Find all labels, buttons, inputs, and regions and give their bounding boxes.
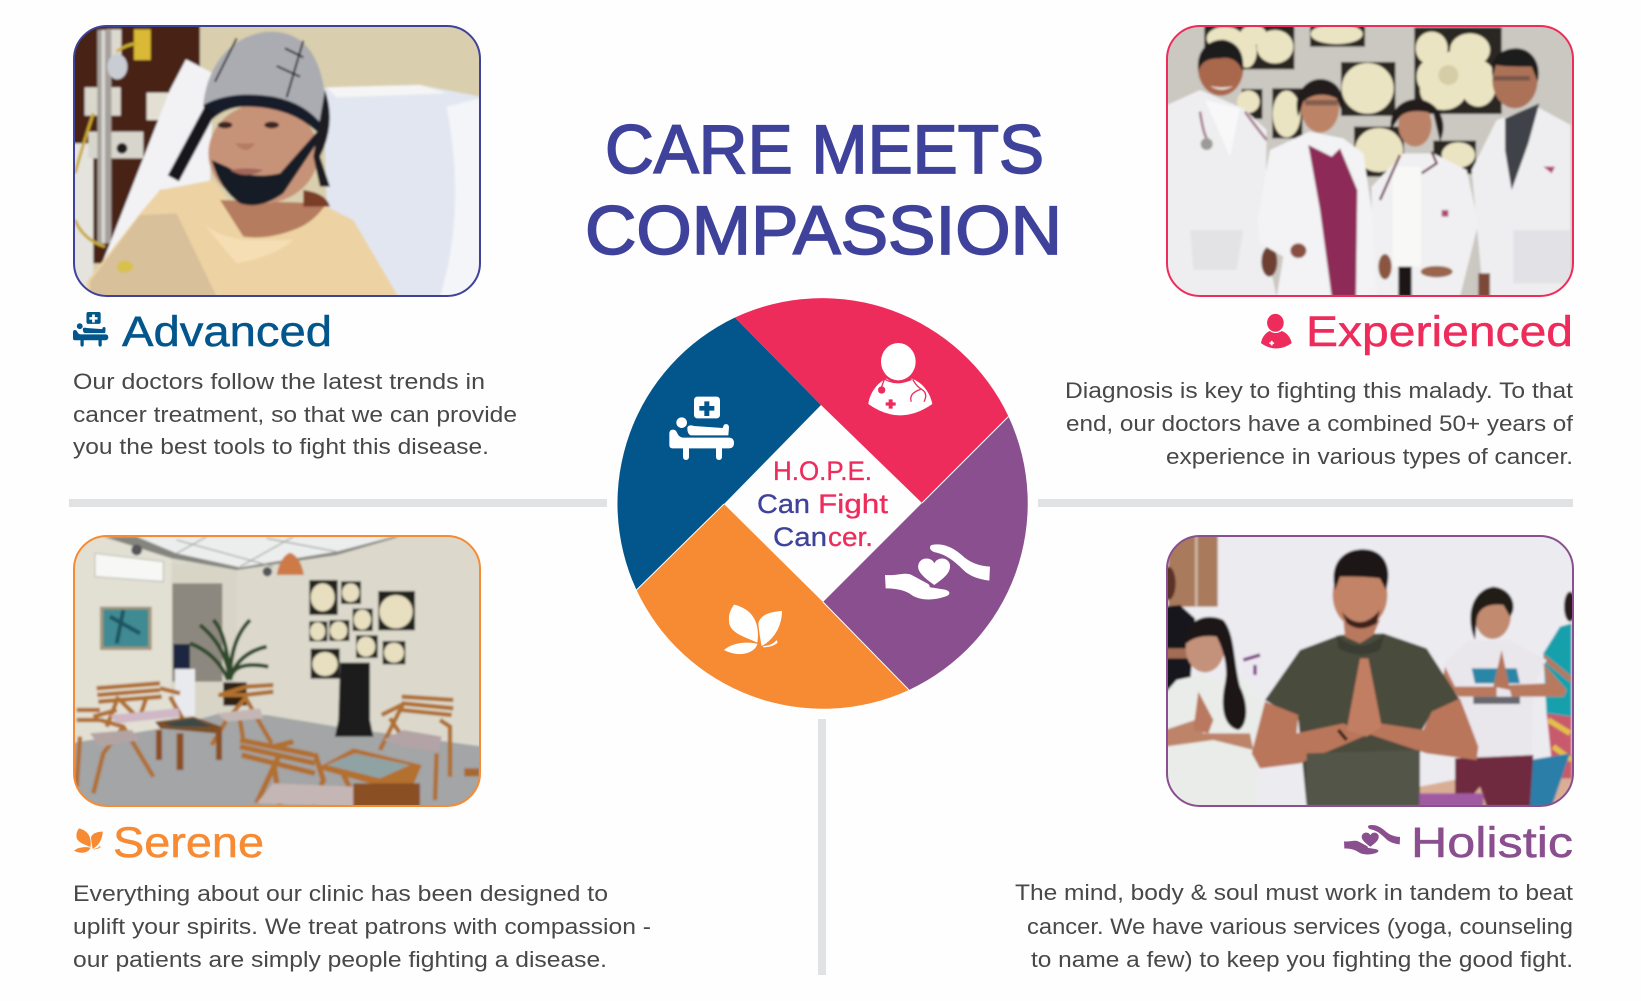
icon: caring hands — [1344, 825, 1400, 854]
icon: patient in bed — [669, 397, 734, 460]
wedge: holistic — [823, 416, 1028, 690]
body text: serene — [73, 881, 651, 972]
body text: experienced: experience in various types of cancer. — [1166, 444, 1573, 469]
photo frame — [1167, 536, 1573, 806]
panel: experienced — [1065, 23, 1577, 469]
photo frame — [74, 536, 480, 806]
photo frame — [1167, 26, 1573, 296]
heading: advanced: Advanced — [122, 308, 332, 356]
body text: experienced: Diagnosis is key to fighting this malady. To that — [1065, 378, 1574, 403]
icon: hospital bed — [73, 312, 108, 347]
centre slogan: cer. — [828, 522, 873, 552]
centre slogan: Can — [773, 522, 827, 552]
divider: bottom vertical — [818, 719, 826, 975]
body text: experienced: end, our doctors have a combined 50+ years of — [1066, 411, 1574, 436]
title — [585, 111, 1062, 269]
photo frame — [74, 26, 480, 296]
body text: advanced: Our doctors follow the latest trends in — [73, 369, 485, 394]
body text: experienced — [1065, 378, 1574, 469]
divider: right horizontal — [1038, 499, 1573, 507]
centre slogan: Can — [757, 489, 810, 519]
panel: advanced — [70, 23, 517, 459]
centre slogan: H.O.P.E. — [773, 456, 872, 486]
body text: serene: uplift your spirits. We treat patrons with compassion - — [73, 914, 651, 939]
icon: doctor with stethoscope — [868, 343, 932, 415]
wedge: advanced — [617, 318, 821, 590]
heading: holistic: Holistic — [1411, 819, 1573, 867]
central wheel — [617, 298, 1028, 709]
photo: patient wearing a cooling cap — [70, 23, 483, 300]
body text: holistic: to name a few) to keep you fighting the good fight. — [1031, 947, 1573, 972]
photo: clinic lounge — [70, 533, 483, 810]
panel: holistic — [1015, 533, 1577, 972]
icon: butterfly — [74, 828, 103, 853]
centre slogan: Fight — [818, 489, 889, 519]
icon: doctor — [1261, 314, 1292, 349]
title: COMPASSION — [585, 192, 1062, 269]
title: CARE MEETS — [605, 111, 1044, 188]
divider: left horizontal — [69, 499, 607, 507]
body text: serene: our patients are simply people fighting a disease. — [73, 947, 607, 972]
heading: experienced: Experienced — [1306, 308, 1573, 356]
body text: advanced — [73, 369, 517, 459]
photo: four doctors in white coats — [1163, 23, 1577, 300]
icon: butterfly — [724, 605, 782, 654]
body text: advanced: cancer treatment, so that we can provide — [73, 402, 517, 427]
body text: holistic: cancer. We have various services (yoga, counseling — [1027, 914, 1573, 939]
icon: hands holding a heart — [885, 544, 990, 599]
heading: serene: Serene — [113, 819, 264, 867]
panel: serene — [70, 533, 651, 972]
centre slogan — [757, 456, 889, 552]
wedge: experienced — [735, 298, 1008, 503]
body text: serene: Everything about our clinic has been designed to — [73, 881, 608, 906]
body text: holistic: The mind, body & soul must work in tandem to beat — [1015, 880, 1574, 905]
wedge: serene — [636, 504, 909, 709]
photo: yoga group with hands together — [1161, 533, 1577, 810]
body text: advanced: you the best tools to fight this disease. — [73, 434, 489, 459]
body text: holistic — [1015, 880, 1574, 972]
